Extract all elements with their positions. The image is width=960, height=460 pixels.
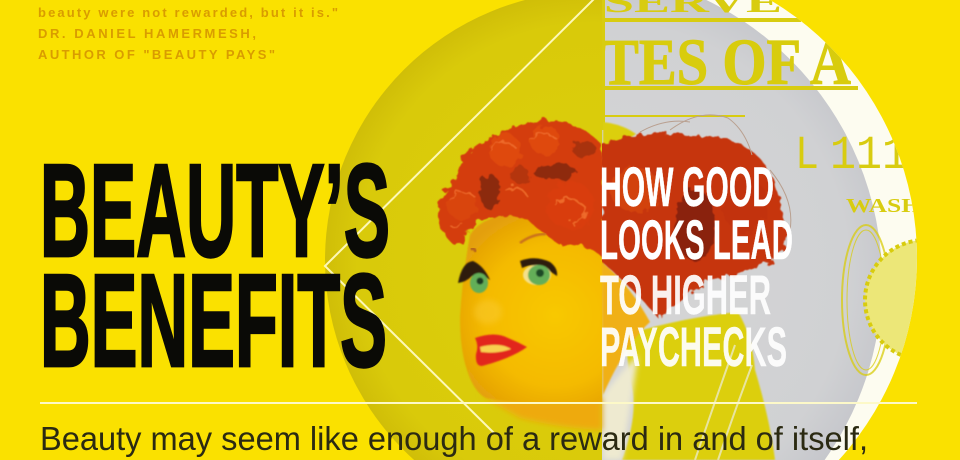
hair curl strokes (450, 134, 585, 228)
doll: neck (480, 395, 602, 430)
bill serial number: 111 (830, 130, 908, 183)
bill rule top (603, 18, 801, 22)
doll: left eye (458, 261, 490, 293)
quote source: AUTHOR OF "BEAUTY PAYS" (38, 47, 275, 62)
circle: grey right half (602, 0, 881, 460)
doll: hair on olive side (438, 120, 606, 262)
bill text: states of america: TES OF A (601, 26, 851, 99)
quote line: beauty were not rewarded, but it is." (38, 5, 338, 20)
intro text: Beauty may seem like enough of a reward in and of itself, (40, 420, 868, 457)
bill edge (602, 0, 605, 130)
bill rule lower (603, 115, 745, 117)
title line 1: BEAUTY’S (40, 137, 390, 284)
yellow patch above top of hair (602, 121, 636, 145)
bill portrait oval (842, 225, 890, 375)
subtitle (600, 155, 793, 378)
doll: left eyebrow (471, 248, 476, 252)
subtitle line 2: LOOKS LEAD (600, 208, 793, 271)
horizontal divider (40, 402, 917, 404)
bill seal (863, 238, 917, 357)
doll: right part of face behind title (602, 262, 650, 395)
circle: white right half (706, 0, 917, 460)
title line 2: BENEFITS (40, 247, 387, 394)
subtitle line 3: TO HIGHER (600, 263, 771, 326)
doll: right eyebrow (520, 234, 546, 243)
subtitle line 1: HOW GOOD (600, 155, 774, 218)
chevron lines (325, 0, 594, 434)
hair wisps (640, 115, 791, 230)
bill serial letter: L (795, 130, 819, 183)
doll: right eye (520, 258, 557, 285)
doll: lips (475, 334, 527, 366)
bill portrait (622, 312, 775, 460)
bill text: washington: WASH (846, 195, 922, 217)
title (40, 137, 390, 394)
doll: face (460, 214, 604, 404)
dollar bill engraving (601, 0, 960, 460)
circle: olive left half (325, 0, 602, 460)
bill rule middle (603, 86, 858, 90)
quote attribution: DR. DANIEL HAMERMESH, (38, 26, 256, 41)
quote text (38, 5, 338, 62)
doll: nose shadow (474, 300, 502, 324)
subtitle line 4: PAYCHECKS (600, 315, 787, 378)
bill portrait pale collar (603, 355, 638, 460)
doll: hair on grey side (600, 115, 791, 318)
bill portrait fold lines (695, 345, 752, 460)
